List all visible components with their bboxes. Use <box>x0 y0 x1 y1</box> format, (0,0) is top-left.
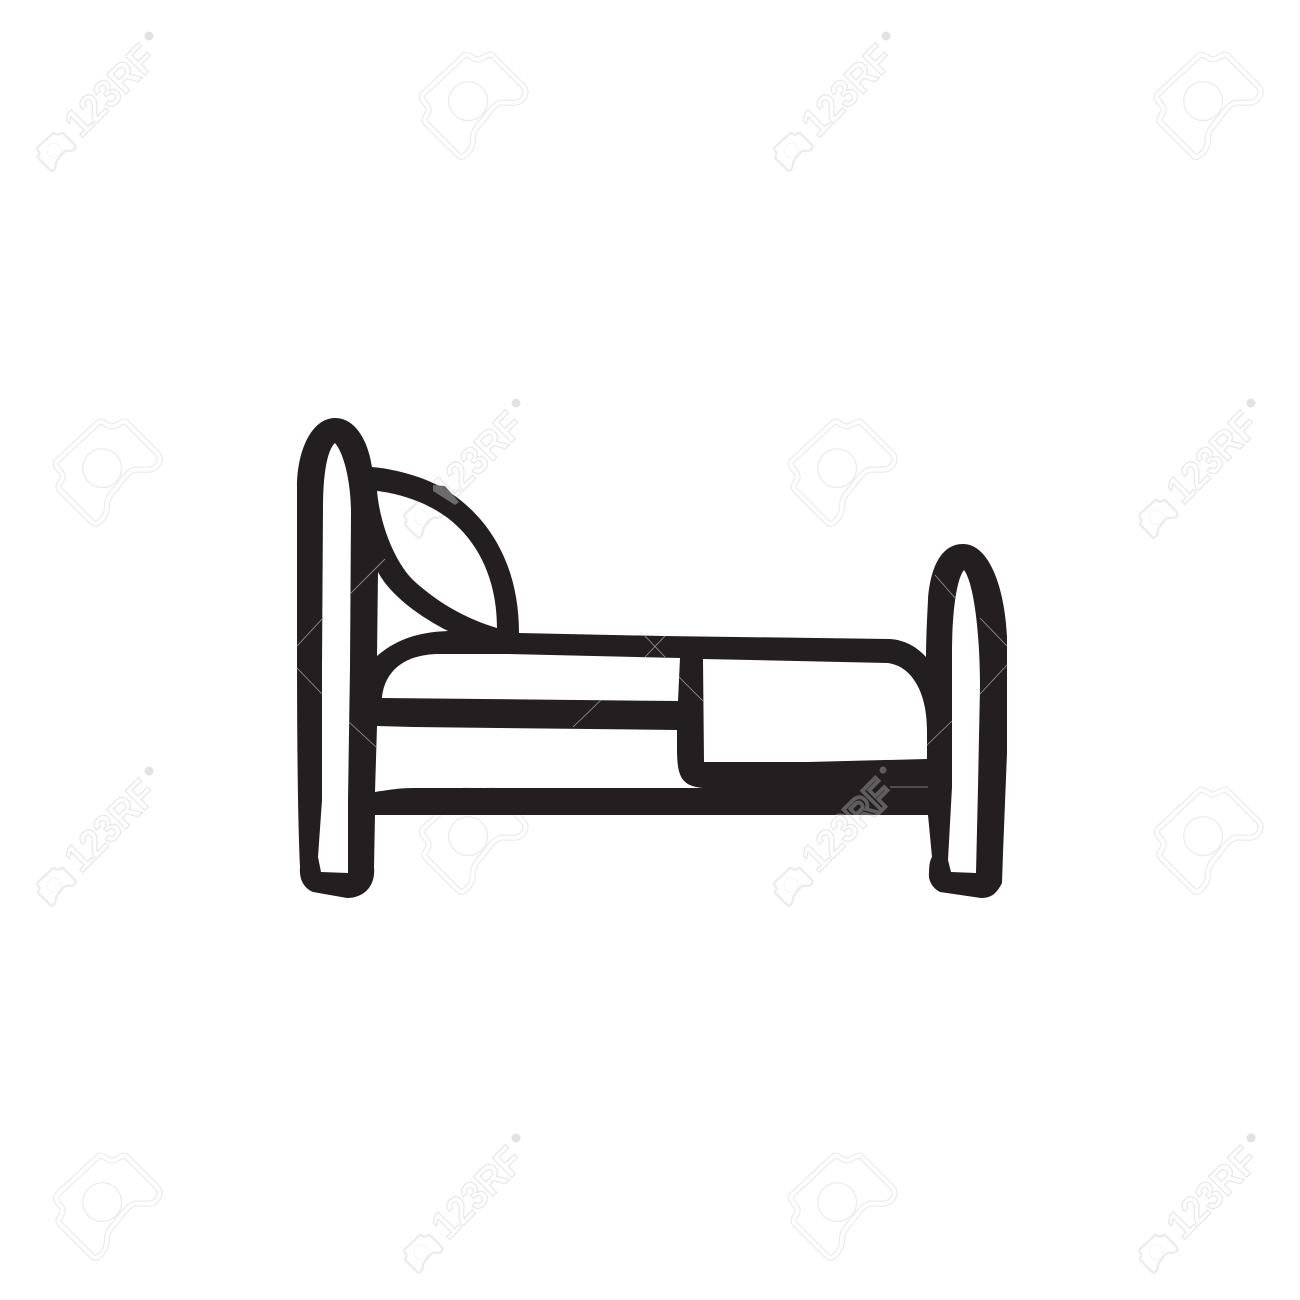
watermark: large stamp row 1 column 2 <box>422 55 526 157</box>
watermark: 123RF logo bottom right <box>1139 1134 1267 1273</box>
watermark: 123RF logo middle centre left <box>404 398 532 538</box>
watermark: 123RF logo lower centre right <box>774 766 902 906</box>
watermark: 123RF logo middle right: 123RF <box>1158 403 1267 512</box>
watermark: 123RF logo middle centre left: 123RF <box>423 403 532 512</box>
watermark: 123RF logo top left <box>37 32 165 171</box>
watermark overlap: RF letters on lower bed band: 123RF <box>793 771 902 880</box>
watermark: 123RF logo middle right <box>1139 398 1267 538</box>
watermark: large stamp row 2 column 1 <box>56 422 160 524</box>
watermark: large stamp row 4 column 1 <box>56 1156 160 1258</box>
watermark: 123RF logo bottom centre left: 123RF <box>423 1138 532 1247</box>
watermark overlap: RF letters on lower bed band <box>835 766 890 815</box>
watermark: large stamp row 3 column 4 <box>1157 790 1261 892</box>
icon: bed sketch <box>297 418 1007 898</box>
watermark: 123RF logo top centre right <box>774 32 902 171</box>
watermark overlap patch on pillow arc <box>433 485 459 505</box>
watermark: large stamp row 3 column 2 <box>422 790 526 892</box>
watermark: 123RF logo lower left: 123RF <box>56 771 165 880</box>
watermark: 123RF logo bottom right: 123RF <box>1158 1138 1267 1247</box>
watermark: 123RF logo top left: 123RF <box>56 36 165 145</box>
watermark: large stamp row 4 column 3 <box>791 1156 895 1258</box>
watermark: 123RF logo top centre right: 123RF <box>793 36 902 145</box>
watermark: 123RF logo lower centre right: 123RF <box>793 771 902 880</box>
watermark: 123RF logo bottom centre left <box>404 1134 532 1273</box>
bed silhouette with cut-out holes <box>297 418 1007 898</box>
watermark: large stamp row 2 column 3 <box>791 422 895 524</box>
watermark: large stamp row 1 column 4 <box>1157 55 1261 157</box>
thin watermark scratch lines on bed <box>297 559 1007 787</box>
watermark: 123RF logo lower left <box>37 766 165 906</box>
